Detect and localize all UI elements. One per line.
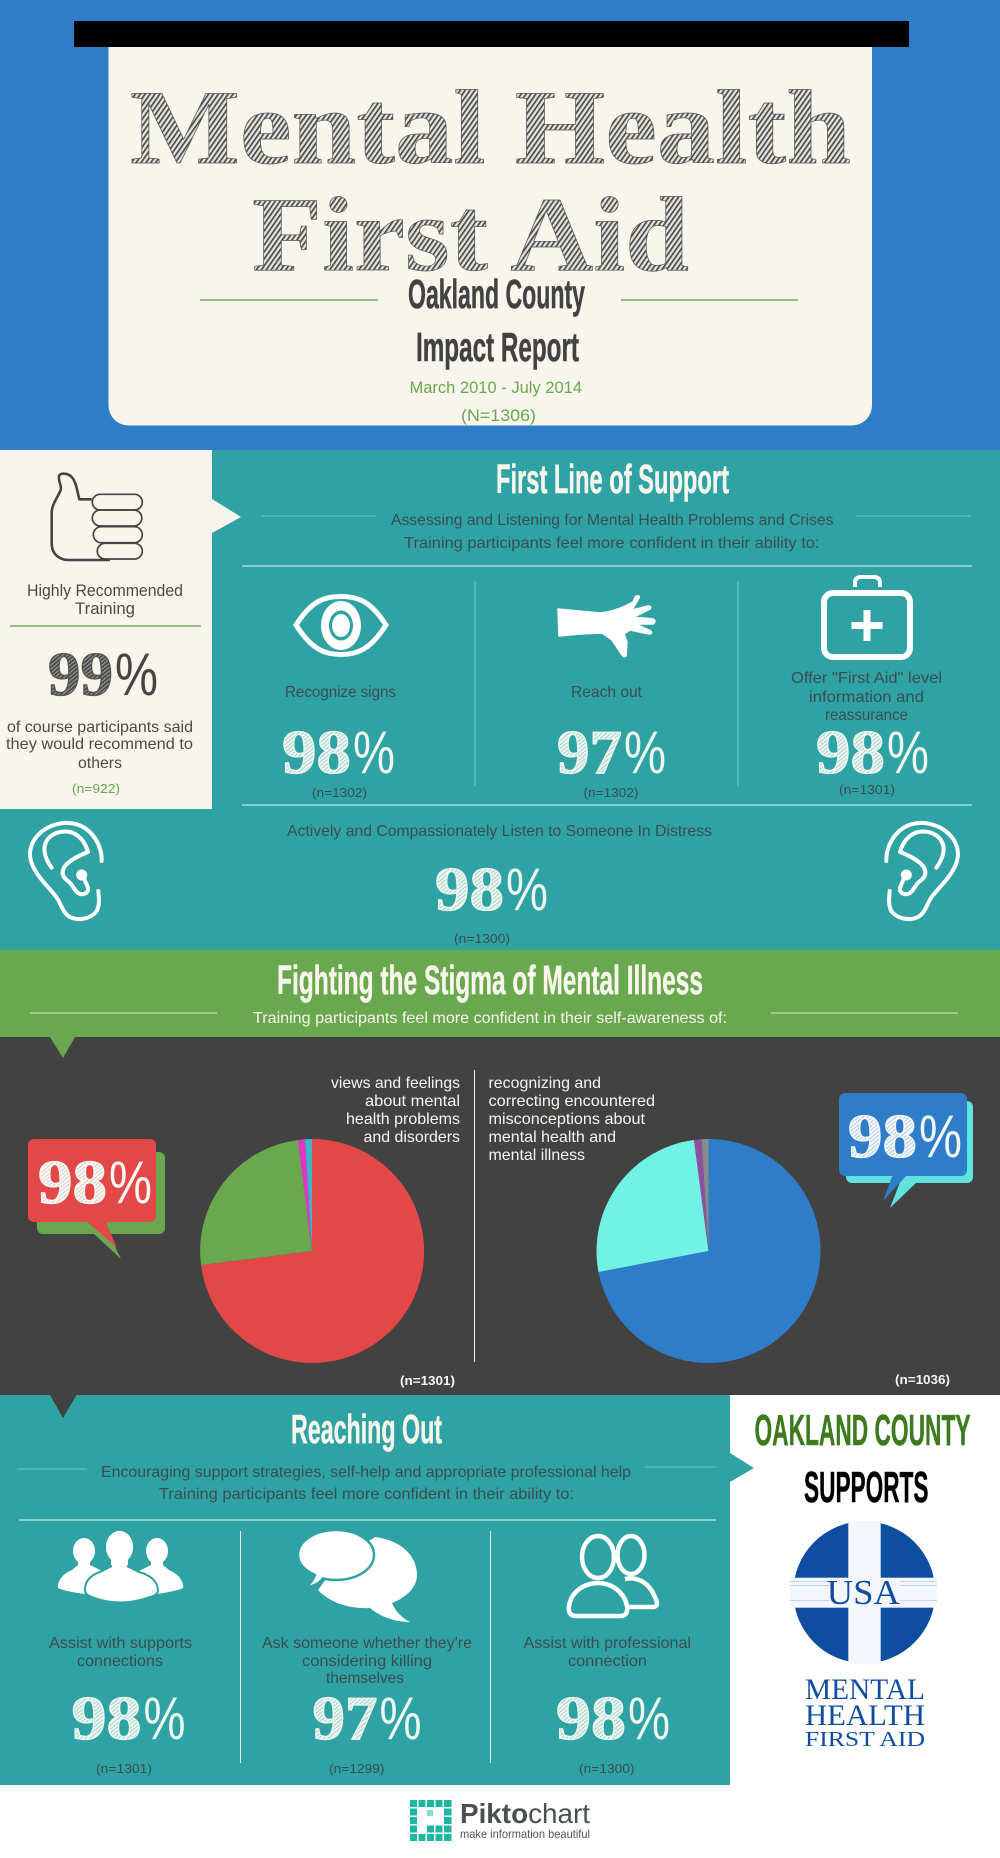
label xyxy=(49,1635,192,1670)
label: views and feelings: and disorders xyxy=(364,1129,460,1146)
label: Highly Recommended xyxy=(27,581,183,600)
icon: eye xyxy=(296,596,386,654)
percent 97 xyxy=(312,1685,422,1753)
sample size: right pie: (n=1036) xyxy=(895,1372,950,1387)
title line 2: First Aid xyxy=(252,176,689,293)
description xyxy=(6,719,193,772)
label: Training xyxy=(75,599,135,618)
description: others xyxy=(78,755,122,772)
sample size: (n=1299) xyxy=(329,1761,384,1776)
label: recognizing and correcting: mental health and xyxy=(488,1129,616,1146)
title line 1: Mental Health xyxy=(130,69,851,186)
stat: actively listen xyxy=(287,823,712,946)
percent 98 xyxy=(282,719,395,787)
percent 97: 97 xyxy=(557,719,622,787)
intro text: Encouraging support strategies, self-help and appropriate professional help xyxy=(101,1464,631,1481)
percent 98: 98 xyxy=(556,1685,626,1753)
tagline: make information beautiful xyxy=(460,1827,590,1841)
label: Recognize signs xyxy=(285,684,396,701)
percent 98: % xyxy=(144,1685,186,1752)
arrow xyxy=(212,499,241,533)
percent 98: 98 xyxy=(38,1149,107,1217)
intro text: Training participants feel more confident in their ability to: xyxy=(159,1486,574,1503)
percent 98: % xyxy=(109,1149,152,1216)
label: Assist with supports xyxy=(49,1635,192,1652)
pie chart: views and feelings xyxy=(200,1139,424,1363)
percent 98 xyxy=(38,1149,152,1217)
percent 98 xyxy=(72,1685,186,1753)
icon: Piktochart grid xyxy=(410,1800,452,1841)
description: they would recommend to xyxy=(6,736,193,753)
label: recognizing and correcting: mental illness xyxy=(488,1147,585,1164)
percent 97 xyxy=(557,719,666,787)
black banner bar xyxy=(74,21,909,47)
stat: reach out xyxy=(557,596,666,800)
percent 99: % xyxy=(115,641,158,708)
percent 97: % xyxy=(624,719,666,786)
stat: first aid xyxy=(791,577,942,797)
label: Assist with professional xyxy=(524,1635,691,1652)
icon: left ear xyxy=(30,823,102,919)
stat: ask about suicide xyxy=(262,1530,472,1776)
date range: March 2010 - July 2014 xyxy=(410,378,582,397)
logo: MHFA USA xyxy=(790,1521,937,1751)
panel: header xyxy=(0,0,1000,450)
percent 97: % xyxy=(380,1685,422,1752)
percent 98: % xyxy=(887,719,929,786)
logo text: Mental Health First Aid: MENTAL xyxy=(805,1673,925,1706)
label xyxy=(27,581,183,618)
footer: Piktochart logo xyxy=(410,1798,590,1841)
label: Actively and Compassionately Listen to Someone In Distress xyxy=(287,823,712,840)
stat: professional connection xyxy=(524,1536,691,1776)
label: views and feelings: health problems xyxy=(346,1111,460,1128)
percent 98: % xyxy=(506,856,548,923)
logo text: Mental Health First Aid: FIRST AID xyxy=(805,1727,925,1751)
label: considering killing xyxy=(302,1653,432,1670)
arrow: from dark panel xyxy=(50,1395,76,1418)
intro text: Assessing and Listening for Mental Health Problems and Crises xyxy=(391,512,834,529)
label: reassurance xyxy=(825,707,908,724)
callout: red speech bubble xyxy=(28,1139,165,1259)
percent 98 xyxy=(848,1103,962,1171)
label: Offer "First Aid" level xyxy=(791,670,942,687)
percent 98 xyxy=(556,1685,670,1753)
sample size: (n=1301) xyxy=(96,1761,152,1776)
label: views and feelings: views and feelings xyxy=(331,1075,460,1092)
logo text: Mental Health First Aid xyxy=(805,1673,925,1751)
label: views and feelings xyxy=(331,1075,460,1146)
percent 98 xyxy=(435,856,548,924)
heading: Fighting the Stigma of Mental Illness xyxy=(277,957,703,1003)
label: recognizing and correcting: misconceptions about xyxy=(488,1111,646,1128)
label xyxy=(791,670,942,724)
label: themselves xyxy=(326,1670,404,1687)
intro text xyxy=(391,512,834,552)
label: connections xyxy=(77,1653,163,1670)
icon: reaching hand xyxy=(558,596,655,657)
label xyxy=(524,1635,691,1670)
label xyxy=(262,1635,472,1687)
arrow: toward sponsor xyxy=(730,1453,754,1482)
panel: sponsor xyxy=(754,1406,970,1751)
logo text: Mental Health First Aid: HEALTH xyxy=(805,1699,925,1732)
percent 98: % xyxy=(628,1685,670,1752)
panel: fighting the stigma xyxy=(0,950,1000,1395)
label: recognizing and correcting: correcting encountered xyxy=(488,1093,655,1110)
percent 97: 97 xyxy=(312,1685,378,1753)
arrow xyxy=(50,1037,75,1058)
percent 98: 98 xyxy=(816,719,885,787)
subtitle: Impact Report: Impact Report xyxy=(416,324,579,370)
percent 99 xyxy=(48,641,158,709)
sample size: (n=1302) xyxy=(584,785,638,800)
heading: First Line of Support: First Line of Support xyxy=(496,456,729,502)
heading: Reaching Out xyxy=(291,1406,442,1452)
icon: right ear xyxy=(886,823,958,919)
percent 98: 98 xyxy=(72,1685,142,1753)
icon: thumbs up xyxy=(52,474,142,560)
icon: group of people xyxy=(58,1531,183,1602)
intro text: Training participants feel more confident in their ability to: xyxy=(404,535,820,552)
logo text: USA: USA xyxy=(827,1573,901,1612)
intro text xyxy=(101,1464,631,1503)
sample size: (n=1300) xyxy=(454,931,510,946)
panel: reaching out xyxy=(0,1395,754,1785)
title card xyxy=(108,47,872,426)
sample size: (n=922) xyxy=(72,781,120,796)
pie chart: recognizing misconceptions xyxy=(597,1139,821,1363)
label: information and xyxy=(809,689,924,706)
percent 98: 98 xyxy=(848,1103,917,1171)
intro text: Training participants feel more confident in their self-awareness of: xyxy=(253,1010,727,1027)
percent 98: % xyxy=(919,1103,962,1170)
label: views and feelings: about mental xyxy=(365,1093,460,1110)
percent 98: % xyxy=(353,719,395,786)
percent 98: 98 xyxy=(435,856,504,924)
icon: two people outline xyxy=(569,1536,657,1616)
sample size: (n=1301) xyxy=(839,782,895,797)
label: Ask someone whether they're xyxy=(262,1635,472,1652)
sample size: (N=1306) xyxy=(461,406,536,425)
panel: first line of support xyxy=(0,450,1000,950)
wordmark: Piktochart xyxy=(460,1798,590,1829)
stat: supports connections xyxy=(49,1531,192,1776)
panel: highly recommended xyxy=(0,450,241,809)
sample size: (n=1302) xyxy=(312,785,367,800)
percent 99: 99 xyxy=(48,641,113,709)
subtitle: Oakland County: Oakland County xyxy=(408,271,585,317)
percent 98 xyxy=(816,719,929,787)
description: of course participants said xyxy=(7,719,193,736)
icon: first aid kit xyxy=(824,577,910,657)
label: Reach out xyxy=(571,684,643,701)
callout: blue speech bubble xyxy=(839,1093,973,1208)
label: recognizing and correcting xyxy=(488,1075,655,1164)
sample size: (n=1300) xyxy=(579,1761,634,1776)
stat: recognize signs xyxy=(282,596,396,800)
icon: speech bubbles xyxy=(298,1530,417,1622)
label: connection xyxy=(568,1653,647,1670)
label: recognizing and correcting: recognizing and xyxy=(488,1075,601,1092)
percent 98: 98 xyxy=(282,719,351,787)
sample size: left pie: (n=1301) xyxy=(400,1373,455,1388)
